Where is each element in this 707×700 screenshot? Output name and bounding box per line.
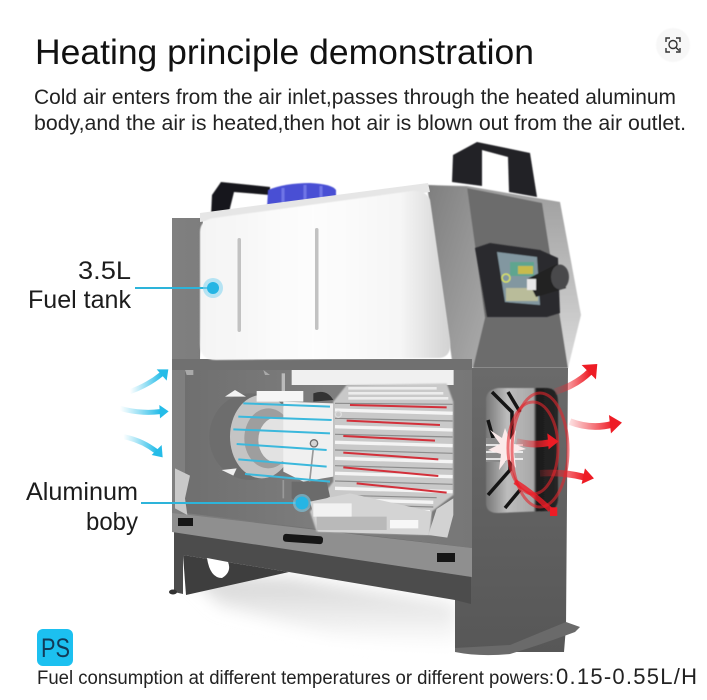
top fins [348, 388, 448, 398]
handle: right [452, 142, 537, 197]
main fin bands [335, 410, 453, 512]
foot: left and base [169, 531, 471, 604]
arrows: cold air in [120, 369, 169, 457]
PS badge [37, 629, 73, 666]
housing: side panel [427, 185, 581, 368]
fuel consumption note: 0.15-0.55L/H [556, 664, 697, 689]
fuel cap [267, 183, 336, 208]
lower engine [292, 482, 330, 508]
callout: fuel tank: 3.5L [78, 257, 131, 285]
description text [34, 86, 686, 135]
cold air lines [233, 403, 332, 482]
right clamp [428, 498, 453, 538]
heat star [488, 428, 526, 470]
front housing outer ring [209, 393, 291, 480]
engine with aluminum body [175, 370, 454, 538]
icon: image search button [656, 28, 690, 62]
slot details [178, 518, 455, 562]
callout: aluminum body [26, 478, 311, 536]
floor shadow [190, 575, 458, 648]
PS badge: PS [41, 633, 70, 663]
front housing inner ring [230, 395, 293, 478]
central white block [283, 402, 333, 482]
control panel with display and knob [475, 243, 569, 317]
title: Heating principle demonstration [35, 33, 534, 72]
frame: left post and shelf [172, 218, 472, 600]
fuel consumption note [37, 664, 697, 689]
foot: right flange [455, 622, 580, 655]
air outlet window [486, 388, 558, 513]
callout: fuel tank [28, 257, 223, 314]
arrows: hot air out [515, 364, 622, 516]
callout: fuel tank: Fuel tank [28, 286, 131, 314]
fin block base [310, 383, 453, 535]
translucent top edge above tank [200, 183, 430, 222]
heater product illustration [120, 142, 622, 655]
left clamp [175, 468, 190, 515]
callout: aluminum body: boby [86, 508, 138, 536]
callout: aluminum body: Aluminum [26, 478, 138, 506]
intake pipe [278, 373, 288, 392]
air flow lines through engine [233, 403, 447, 493]
housing: lower right body [455, 368, 568, 652]
red heat rings [508, 393, 568, 507]
fuel consumption note: Fuel consumption at different temperatures or different powers: [37, 668, 554, 689]
interior bay [185, 370, 472, 548]
fuel tank [200, 191, 450, 360]
rear white panel [292, 370, 454, 385]
description text: body,and the air is heated,then hot air is blown out from the air outlet. [34, 112, 686, 135]
bay lower lip [172, 513, 472, 577]
handle: left [211, 182, 270, 216]
description text: Cold air enters from the air inlet,passes through the heated aluminum [34, 86, 676, 109]
hot air lines [343, 405, 447, 493]
